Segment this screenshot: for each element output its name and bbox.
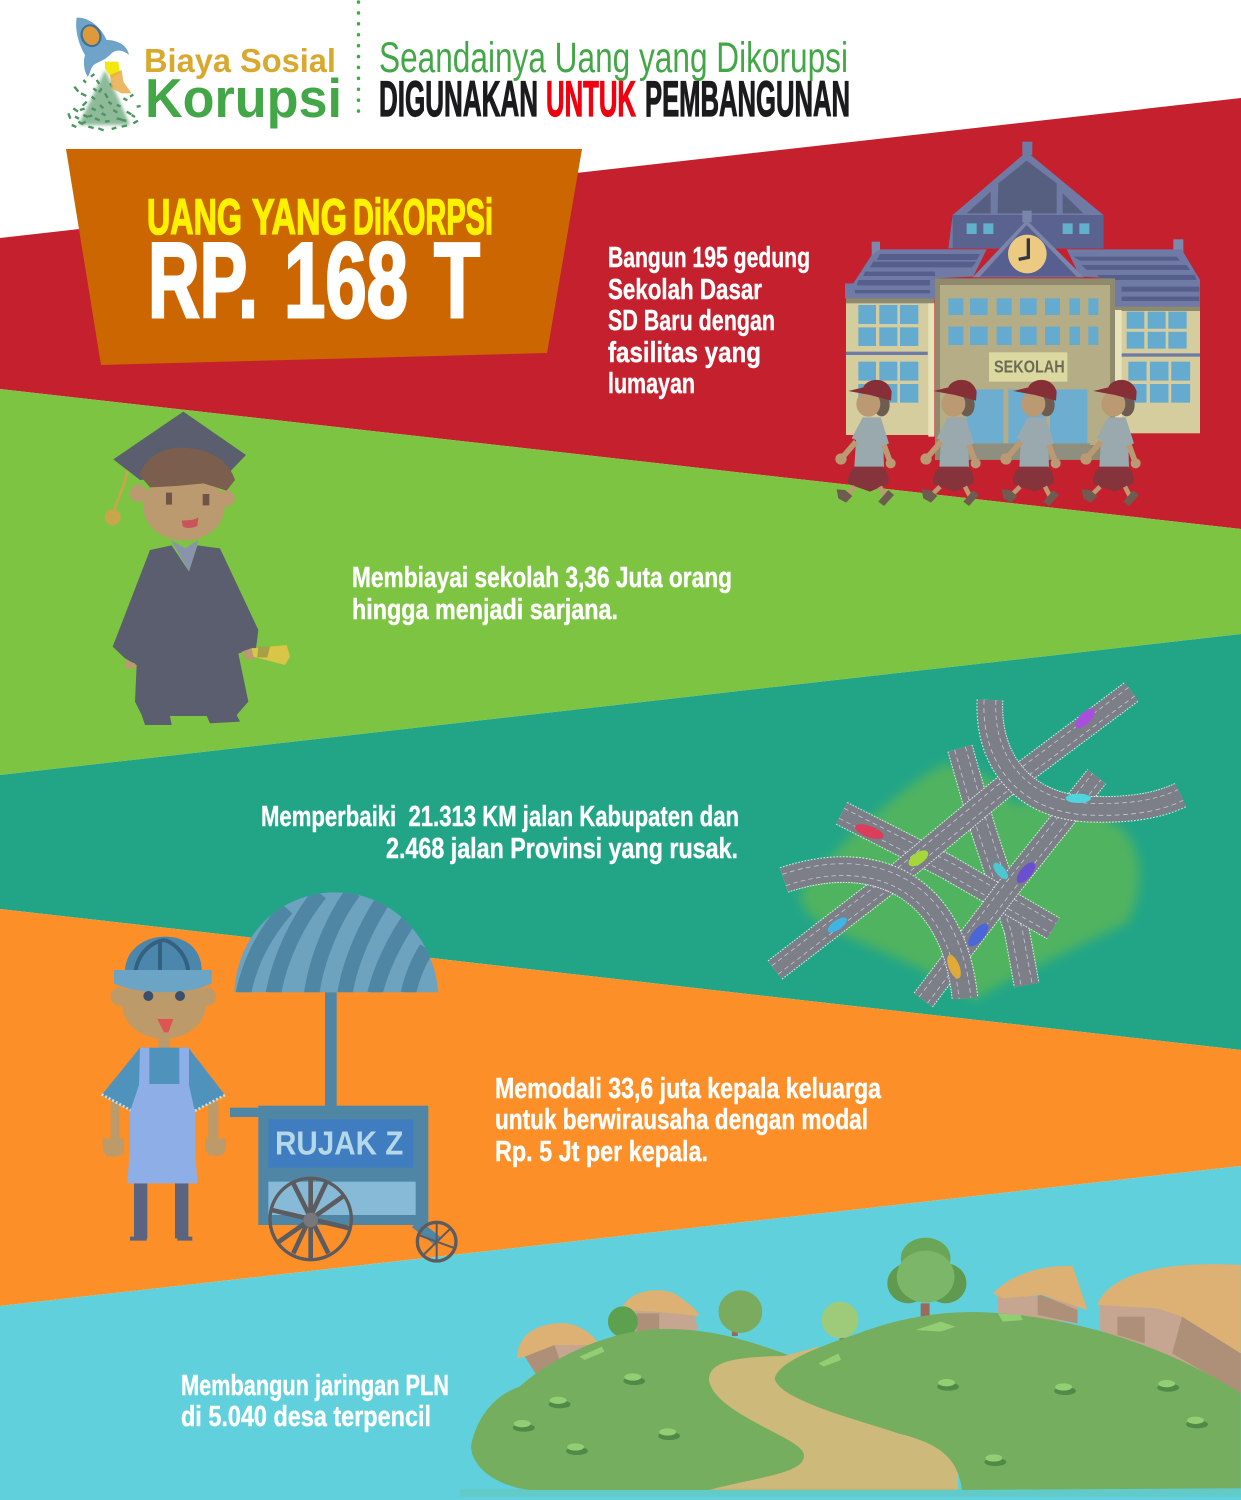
text: roads	[261, 801, 739, 865]
panel: cyan band village	[0, 1166, 1241, 1500]
plaque amount: T	[434, 220, 480, 340]
text: school: lumayan	[608, 368, 695, 400]
cart	[230, 1108, 260, 1117]
plaque amount	[148, 220, 480, 340]
text: school	[608, 242, 810, 400]
illustration: school with children: SEKOLAH	[994, 357, 1065, 377]
plaque amount: RP.	[148, 220, 258, 340]
text: vendor: Rp. 5 Jt per kepala.	[495, 1136, 708, 1168]
plaque label	[147, 189, 493, 245]
text: electricity	[181, 1370, 449, 1433]
illustration: school with children	[835, 142, 1200, 506]
text: school: Bangun 195 gedung	[608, 242, 810, 274]
vendor	[103, 1102, 226, 1157]
text: roads: Memperbaiki 21.313 KM jalan Kabupaten dan	[261, 801, 739, 833]
illustration: road interchange	[775, 692, 1181, 1000]
hill shapes	[471, 1329, 819, 1490]
text: roads: 2.468 jalan Provinsi yang rusak.	[386, 833, 738, 865]
panel: red band school	[0, 98, 1241, 529]
illustration: vendor and cart	[102, 890, 456, 1261]
text: scholarship: hingga menjadi sarjana.	[352, 594, 618, 626]
dotted divider	[357, 2, 360, 112]
text: scholarship: Membiayai sekolah 3,36 Juta orang	[352, 562, 732, 594]
panel: green band graduate	[0, 389, 1241, 775]
heading line 2: UNTUK	[546, 71, 636, 127]
text: vendor	[495, 1073, 882, 1168]
text: school: SD Baru dengan	[608, 305, 775, 337]
text: electricity: di 5.040 desa terpencil	[181, 1401, 431, 1433]
trees	[608, 1238, 966, 1342]
illustration: vendor and cart: RUJAK Z	[275, 1125, 403, 1162]
logo: rocket with money	[68, 18, 141, 130]
heading line 2: DIGUNAKAN	[379, 71, 538, 127]
centre block	[935, 278, 1115, 460]
illustration: graduate	[105, 412, 290, 725]
text: vendor: untuk berwirausaha dengan modal	[495, 1104, 868, 1136]
panel: orange band vendor	[0, 909, 1241, 1306]
heading line 2	[379, 71, 850, 127]
plaque amount: 168	[284, 220, 408, 340]
plaque label: YANG	[252, 189, 347, 245]
illustration: village hills	[460, 1238, 1241, 1497]
cars	[825, 705, 1098, 980]
wings	[846, 298, 934, 435]
panel: teal band roads	[0, 634, 1241, 1050]
heading line 2: PEMBANGUNAN	[645, 71, 850, 127]
heading line 1: Seandainya Uang yang Dikorupsi	[379, 34, 848, 82]
logo text: Biaya Sosial: Biaya Sosial	[144, 42, 336, 79]
text: school: Sekolah Dasar	[608, 274, 762, 306]
plaque label: DiKORPSi	[353, 189, 493, 245]
logo text: Korupsi: Korupsi	[145, 67, 342, 129]
wheels	[270, 1178, 456, 1261]
children	[835, 380, 896, 506]
bushes	[549, 1397, 571, 1408]
umbrella	[232, 890, 442, 993]
text: scholarship	[352, 562, 732, 626]
houses	[525, 1340, 597, 1380]
text: vendor: Memodali 33,6 juta kepala keluarga	[495, 1073, 882, 1105]
plaque label: UANG	[147, 189, 242, 245]
text: school: fasilitas yang	[608, 337, 761, 369]
panel: corrupted money plaque	[66, 149, 582, 365]
text: electricity: Membangun jaringan PLN	[181, 1370, 449, 1402]
